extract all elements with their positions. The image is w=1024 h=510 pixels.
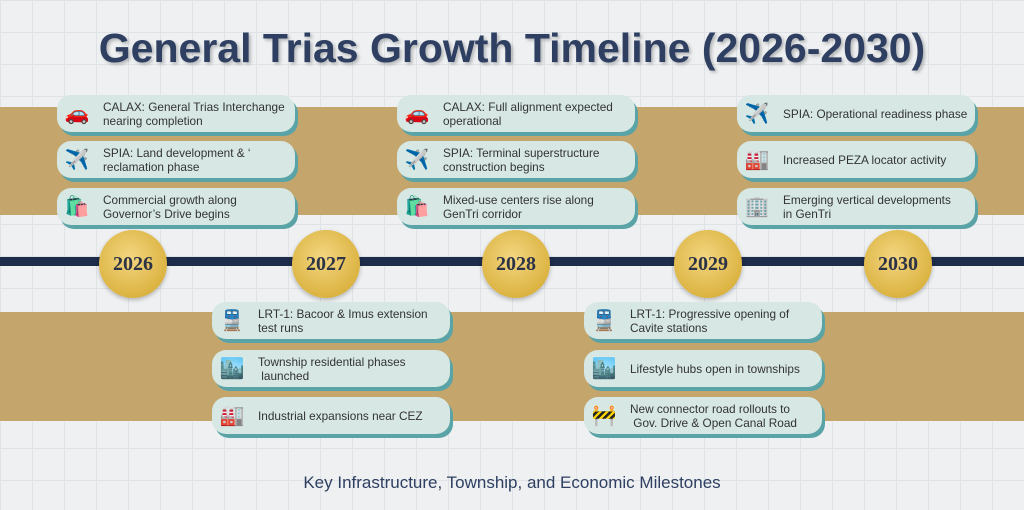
card 2028 b: construction begins — [443, 160, 545, 174]
year 2027: 2027 — [306, 252, 346, 274]
card 2030 c — [737, 188, 975, 225]
card 2027 b: launched — [261, 368, 309, 382]
top band — [0, 107, 1024, 215]
card 2028 c: GenTri corridor — [443, 206, 522, 220]
card 2026 c: Governor’s Drive begins — [103, 206, 230, 220]
card 2027 b: 🏙️ — [220, 358, 244, 380]
title: General Trias Growth Timeline (2026-2030) — [99, 25, 925, 71]
card 2029 b: Lifestyle hubs open in townships — [630, 362, 800, 376]
bottom band — [0, 312, 1024, 421]
card 2027 a: LRT-1: Bacoor & Imus extension — [258, 306, 428, 320]
card 2029 a: Cavite stations — [630, 320, 707, 334]
card 2028 b — [397, 141, 635, 178]
card 2026 c — [57, 188, 295, 225]
card 2029 c: New connector road rollouts to — [630, 402, 790, 416]
card 2030 c: Emerging vertical developments — [783, 192, 951, 206]
year 2026 — [99, 230, 167, 298]
timeline line — [0, 257, 1024, 266]
card 2026 a: nearing completion — [103, 114, 203, 128]
card 2028 c — [397, 188, 635, 225]
card 2030 a: SPIA: Operational readiness phase — [783, 106, 967, 120]
card 2028 a: 🚗 — [405, 102, 429, 124]
card 2027 b — [212, 350, 450, 387]
card 2027 c — [212, 397, 450, 434]
year 2030 — [864, 230, 932, 298]
subtitle: Key Infrastructure, Township, and Economic Milestones — [303, 473, 721, 492]
card 2030 b: 🏭 — [745, 148, 769, 170]
card 2029 c: Gov. Drive & Open Canal Road — [633, 416, 797, 430]
card 2027 a: 🚆 — [220, 310, 244, 332]
card 2028 a: CALAX: Full alignment expected — [443, 100, 613, 114]
year 2028: 2028 — [496, 252, 536, 274]
card 2028 c: 🛍️ — [405, 196, 429, 218]
card 2027 c: 🏭 — [220, 404, 244, 426]
year 2026: 2026 — [113, 252, 153, 274]
card 2028 c: Mixed-use centers rise along — [443, 192, 594, 206]
card 2029 b — [584, 350, 822, 387]
card 2029 a — [584, 302, 822, 339]
card 2027 a: test runs — [258, 320, 303, 334]
card 2030 c: 🏢 — [745, 196, 769, 218]
card 2028 b: ✈️ — [405, 148, 429, 170]
card 2026 b: reclamation phase — [103, 160, 199, 174]
year 2027 — [292, 230, 360, 298]
card 2030 b: Increased PEZA locator activity — [783, 152, 946, 166]
year 2030: 2030 — [878, 252, 918, 274]
year 2028 — [482, 230, 550, 298]
card 2030 a: ✈️ — [745, 102, 769, 124]
card 2029 c — [584, 397, 822, 434]
card 2029 a: LRT-1: Progressive opening of — [630, 306, 789, 320]
card 2030 c: in GenTri — [783, 206, 831, 220]
year 2029: 2029 — [688, 252, 728, 274]
card 2028 a: operational — [443, 114, 501, 128]
card 2026 c: 🛍️ — [65, 196, 89, 218]
card 2026 b — [57, 141, 295, 178]
year 2029 — [674, 230, 742, 298]
card 2028 b: SPIA: Terminal superstructure — [443, 146, 599, 160]
card 2026 a: 🚗 — [65, 102, 89, 124]
card 2027 b: Township residential phases — [258, 354, 406, 368]
card 2029 a: 🚆 — [592, 310, 616, 332]
card 2026 a: CALAX: General Trias Interchange — [103, 100, 285, 114]
card 2027 c: Industrial expansions near CEZ — [258, 408, 423, 422]
card 2030 a — [737, 95, 975, 132]
card 2028 a — [397, 95, 635, 132]
card 2030 b — [737, 141, 975, 178]
card 2026 b: ✈️ — [65, 148, 89, 170]
card 2026 b: SPIA: Land development & ‘ — [103, 146, 251, 160]
card 2029 b: 🏙️ — [592, 358, 616, 380]
card 2029 c: 🚧 — [592, 404, 616, 426]
card 2026 c: Commercial growth along — [103, 192, 237, 206]
card 2027 a — [212, 302, 450, 339]
card 2026 a — [57, 95, 295, 132]
